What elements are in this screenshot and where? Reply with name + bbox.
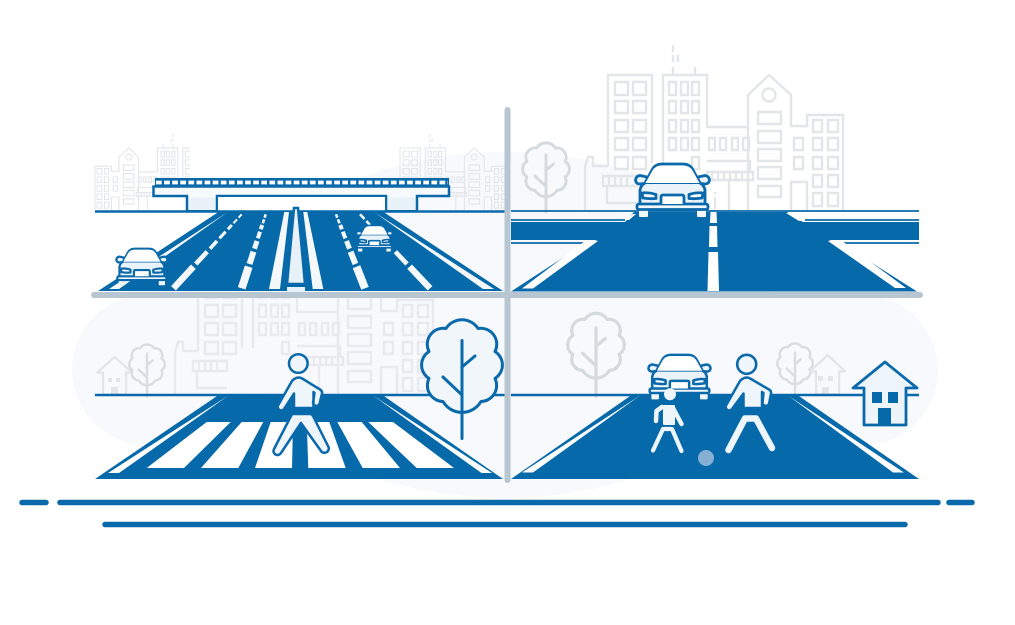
city skyline	[585, 45, 843, 210]
road edge stripes	[522, 396, 904, 472]
horizon line	[95, 394, 505, 396]
tree: large grey	[568, 313, 624, 396]
car: right lane	[356, 225, 393, 251]
panel: pedestrian crossing	[95, 298, 504, 479]
ground line top	[22, 500, 972, 505]
house: grey	[97, 357, 132, 395]
car: left foreground	[116, 249, 167, 285]
horizon line	[511, 394, 919, 396]
panel: intersection	[511, 45, 919, 292]
pedestrian on crossing	[273, 354, 329, 455]
highway road surface	[98, 211, 503, 291]
distant pedestrian	[714, 192, 716, 209]
panel: highway with overpass	[95, 134, 508, 292]
highway edge and solid lines	[109, 212, 494, 289]
house: grey	[810, 355, 845, 395]
tree: small grey	[129, 344, 165, 397]
highway lane dashes	[174, 214, 430, 288]
intersection white edge stripes	[522, 213, 906, 288]
horizon line	[95, 210, 505, 213]
road surface	[511, 394, 919, 479]
adult pedestrian	[726, 355, 772, 450]
background blob	[72, 152, 938, 498]
centre line dashes	[708, 212, 719, 291]
ball	[698, 450, 714, 466]
city skyline left	[94, 134, 190, 210]
car: front view	[636, 164, 710, 217]
city skyline	[174, 298, 434, 394]
illustration: four road scenes	[19, 45, 975, 528]
grey divider bars	[94, 110, 920, 480]
highway median	[287, 208, 305, 292]
tree: grey	[523, 143, 569, 212]
house: blue	[853, 362, 917, 425]
tree: large blue	[422, 320, 502, 438]
ground line bottom	[105, 522, 905, 527]
road edge stripes	[108, 396, 492, 473]
overpass bridge	[154, 178, 449, 211]
child pedestrian	[653, 388, 682, 451]
car: behind pedestrians	[648, 355, 711, 399]
cross road and main road surface	[511, 212, 919, 292]
tree: small grey	[777, 343, 813, 396]
horizon lines and side road edges	[511, 211, 919, 243]
city skyline right	[400, 134, 504, 210]
panel: residential street	[511, 313, 919, 479]
zebra crossing	[147, 422, 454, 468]
road surface	[95, 394, 503, 479]
